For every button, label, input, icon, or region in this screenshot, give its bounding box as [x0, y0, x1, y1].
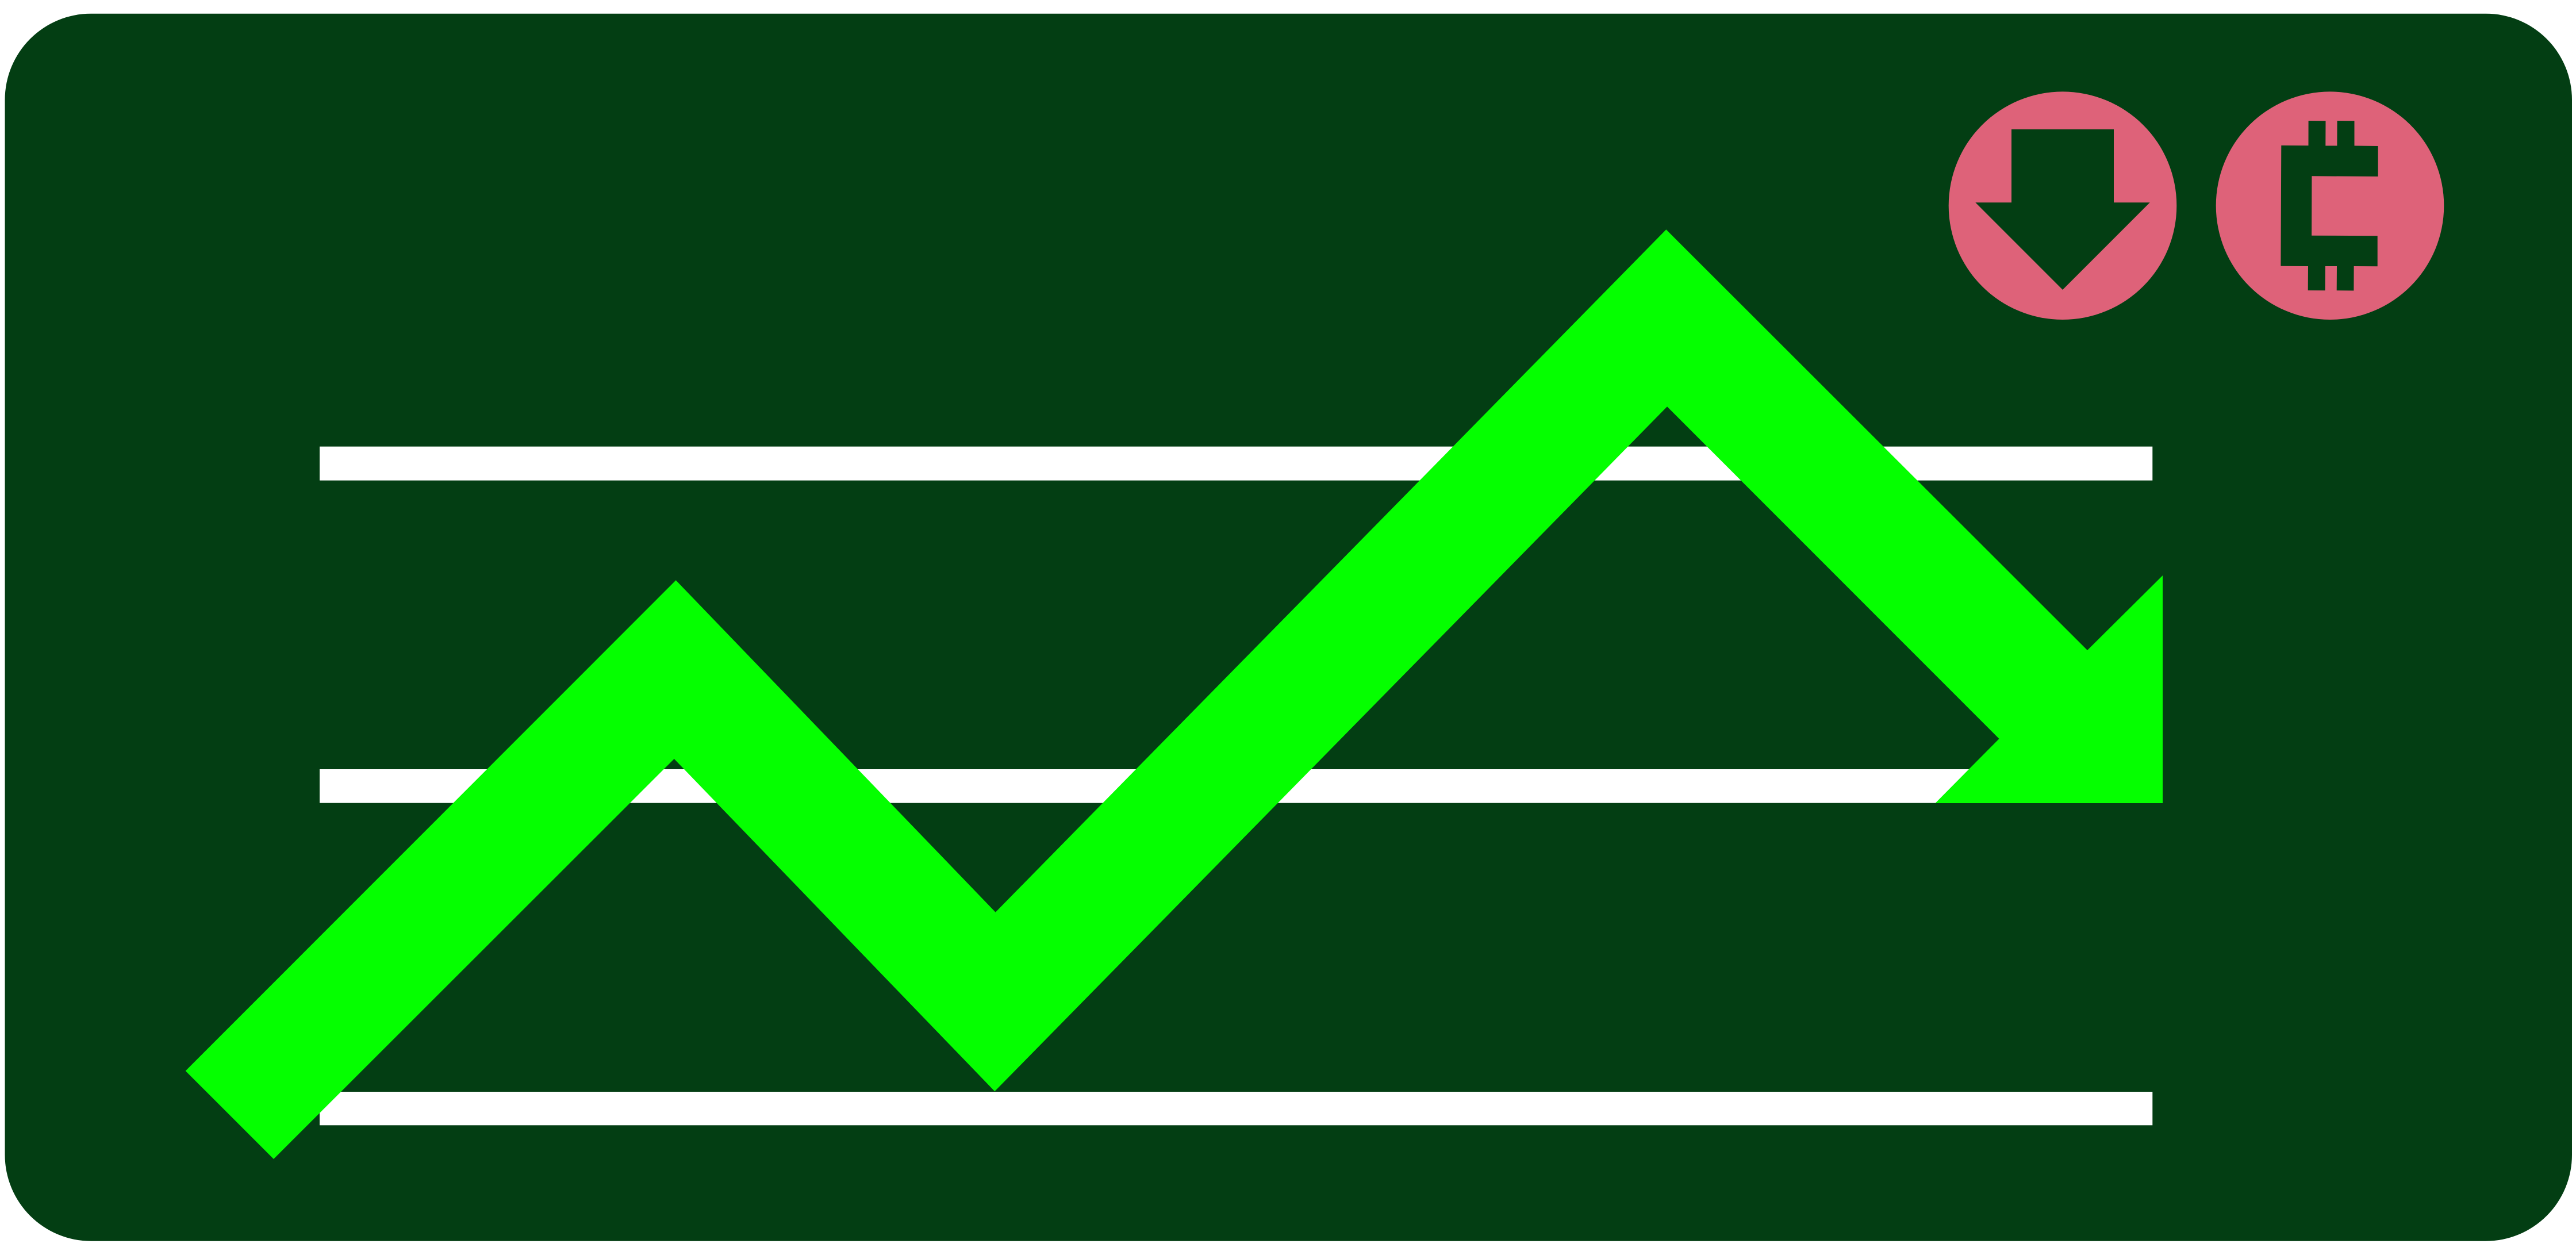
arrow: green zigzag trend line [186, 229, 2163, 1159]
icon: pink badge with down arrow [1949, 91, 2176, 320]
chart grid lines [320, 447, 2152, 1125]
icon: pink badge with bitcoin symbol [2216, 91, 2444, 320]
